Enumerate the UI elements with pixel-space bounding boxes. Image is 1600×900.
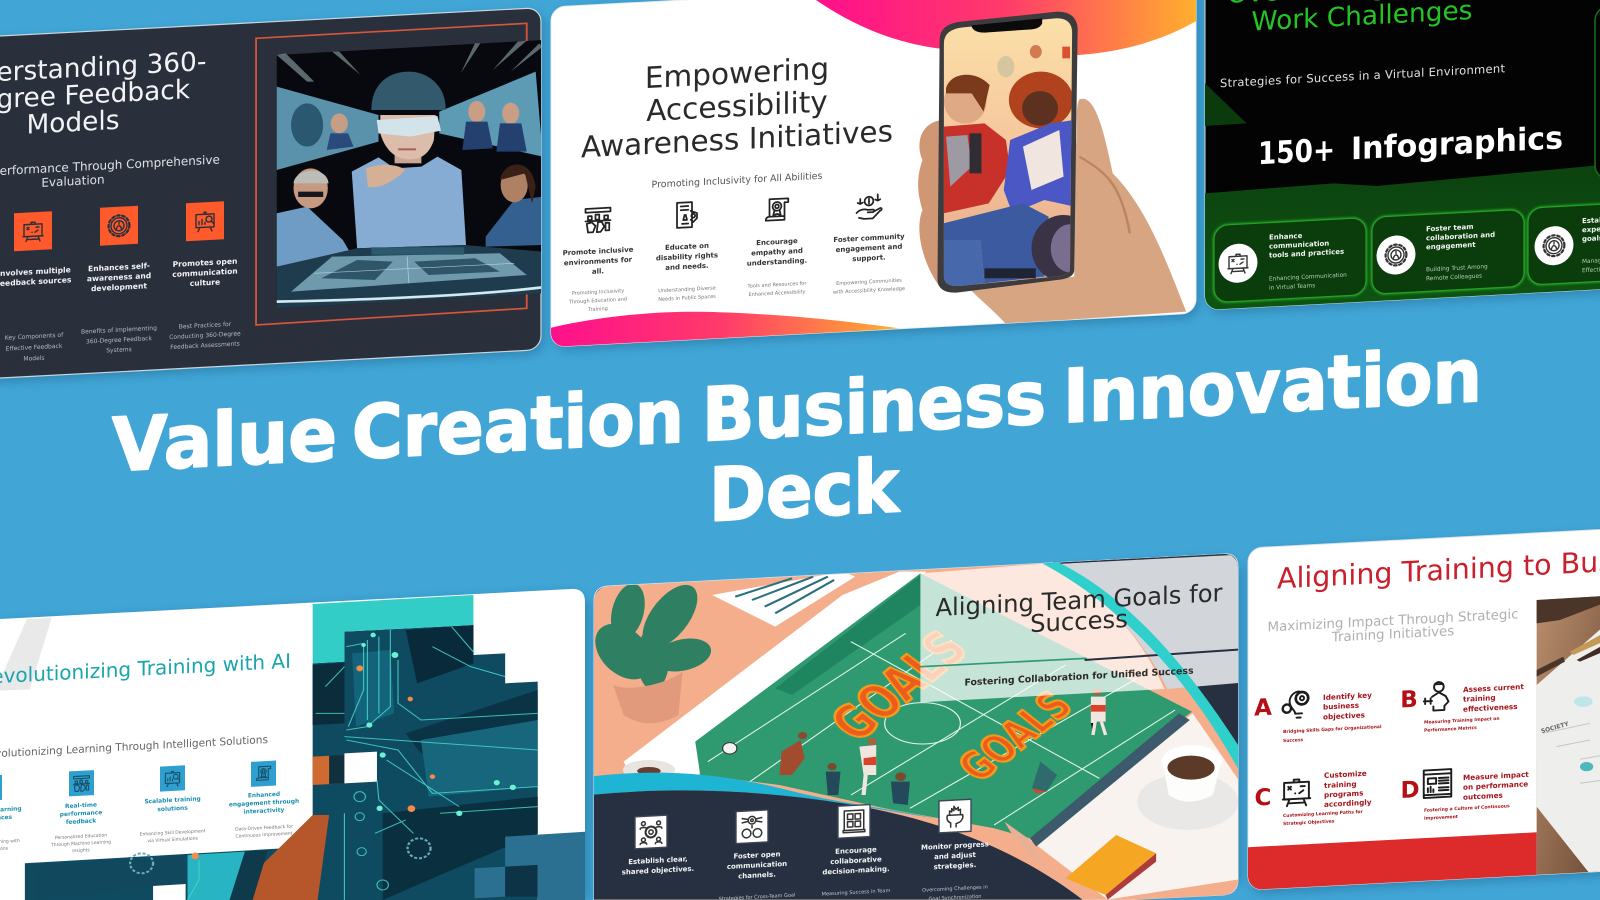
item D: on performance [1463,779,1528,792]
image: phone in hand with gradient waves [549,0,1198,353]
phone screen people [944,45,1072,286]
slide text [1254,536,1600,831]
item A: business [1323,701,1359,712]
bullet labels [622,839,989,888]
item D: Measure impact [1463,770,1529,782]
bullet labels: Promotes open [173,257,237,269]
bullet labels: performance [60,810,102,818]
bullet labels: all. [592,267,604,276]
bullet labels: interactivity [244,808,285,816]
panel: accessibility slide [549,0,1199,353]
bullet labels: collaborative [830,855,882,866]
item C: training [1324,779,1357,790]
bullet labels: channels. [738,870,776,880]
overlay headline: 150+ [1258,132,1335,172]
captions: Effective Feedback [6,343,63,353]
captions: via Virtual Simulations [147,836,199,844]
card: communication: Enhancing Communication [1269,273,1347,283]
card: expectations [1528,200,1600,285]
title: Awareness Initiatives [581,114,893,164]
heading: Value [112,392,337,489]
bullet labels: Encourage [835,846,877,856]
heading [112,333,1482,539]
item D: outcomes [1463,791,1503,802]
panel: team goals slide [584,545,1251,900]
item A [1254,687,1382,746]
captions: Models [23,355,45,363]
bullet labels: Monitor progress [921,840,989,852]
bullet labels: empathy and [751,247,803,258]
title [0,46,206,145]
item B [1400,678,1524,735]
bullet labels: disability rights [656,251,718,263]
item A: Bridging Skills Gaps for Organizational [1283,724,1382,735]
item A: Identify key [1323,691,1372,702]
card: collaboration: engagement [1426,241,1476,251]
card: communication: in Virtual Teams [1269,283,1315,292]
item B: Measuring Training Impact on [1424,716,1500,726]
image: woman at holographic table [256,23,543,325]
card: collaboration: Building Trust Among [1426,264,1488,273]
item B: effectiveness [1463,702,1518,714]
item C: accordingly [1324,798,1372,809]
bullet labels: communication [727,860,787,871]
title: Empowering [645,51,829,95]
heading: Business [702,355,1046,459]
bullet labels: shared objectives. [622,865,694,877]
title: Accessibility [646,85,828,128]
image: paper and pens with red band: SOCIETY [1540,720,1570,735]
captions: Data-Driven Feedback for [235,824,293,833]
icon: board [14,211,52,251]
bullet labels: feedback [66,818,97,826]
captions: Conducting 360-Degree [169,330,241,341]
card: collaboration: Foster team [1426,223,1474,233]
captions: Tools and Resources for [747,281,807,290]
bullet labels: Scalable training [144,796,201,805]
outside arc areas [1052,554,1238,745]
bullet labels: support. [852,253,886,263]
bullet labels: engagement through [229,799,299,809]
image: soccer field on desk [584,545,1251,900]
captions: Benefits of Implementing [81,325,157,336]
icons row [586,192,882,233]
captions: Personalized Education [55,832,107,841]
bullet labels: solutions [157,806,188,813]
item D [1400,765,1529,823]
title: Aligning Team Goals for [935,578,1223,622]
panel: remote work slide [1205,0,1600,323]
heading: Innovation [1063,333,1482,440]
title: Success [1030,604,1128,638]
captions: Feedback Assessments [170,340,240,351]
captions: Through Education and [568,297,627,306]
bullet labels: culture [190,277,220,288]
captions: Systems [106,346,132,354]
item A: A [1254,695,1272,722]
item B: Assess current [1463,682,1524,694]
slide text [0,648,299,860]
item C: Customizing Learning Paths for [1283,809,1364,819]
title [581,48,893,164]
captions: Understanding Diverse [658,285,716,294]
captions: Training [587,306,608,313]
players [779,688,1106,805]
overlay headline: Infographics [1351,120,1563,167]
background shapes [1205,83,1600,323]
item B: B [1400,687,1418,714]
captions [568,273,905,314]
bullet labels: engagement and [836,243,902,254]
bullet labels [563,231,905,278]
item D: D [1400,777,1420,804]
bullet labels [0,257,238,298]
item A: objectives [1323,710,1365,722]
captions: Key Components of [5,332,64,342]
item D: Improvement [1424,814,1459,822]
bottom wave [590,773,935,818]
captions: Continuous Improvement [235,831,293,840]
item B: Performance Metrics [1424,725,1477,734]
image: paper and pens with red band [1240,596,1600,897]
slide text [622,578,1223,900]
captions: 360-Degree Feedback [86,335,152,345]
subtitle: Training Initiatives [1331,624,1454,646]
heading: Creation [352,374,684,477]
bullet labels: strategies. [934,861,976,871]
captions: Empowering Communities [836,278,902,287]
captions: Through Machine Learning [50,839,111,848]
image: circuit mosaic [0,595,587,900]
title: Models [27,105,119,141]
icon: gear [100,206,138,246]
bullet labels: Foster community [833,232,905,244]
slide text [0,44,241,368]
bullet labels: development [91,281,147,293]
translucent header [920,563,1165,702]
subtitle: Promoting Inclusivity for All Abilities [652,171,822,191]
subtitle: Maximizing Impact Through Strategic [1268,607,1518,635]
card: communication [1214,218,1366,303]
bullet labels: understanding. [747,257,807,268]
icons row [635,799,971,849]
captions: Best Practices for [179,321,232,331]
captions [5,320,241,364]
bullet labels: communication [172,267,238,279]
captions [719,882,988,900]
card: communication: tools and practices [1269,248,1344,260]
bullet labels: and needs. [665,262,709,272]
panel: 360-degree feedback slide [0,8,544,385]
title [935,578,1223,643]
bullet labels: Real-time [65,802,97,810]
card: communication: Enhance [1269,232,1303,242]
bullet labels: environments for [564,256,633,267]
icon: chart [186,201,224,241]
captions: Needs in Public Spaces [658,294,716,303]
item C: Customize [1324,769,1367,780]
item C: Strategic Objectives [1283,818,1335,827]
subtitle [1268,607,1518,649]
captions: Insights [72,847,90,854]
item C: C [1255,785,1271,812]
panel: AI training slide [0,589,588,900]
bullet labels: decision-making. [822,865,890,877]
card: collaboration: Remote Colleagues [1426,273,1482,282]
bullet labels: Foster open [734,850,780,861]
subtitle: Fostering Collaboration for Unified Success [964,666,1194,689]
bullet labels: Educate on [665,242,709,252]
GOALS lettering: GOALS [818,621,980,751]
item A: Success [1283,737,1303,744]
overlay headline [1258,120,1563,172]
slide content [1214,0,1600,303]
captions: Promoting Inclusivity [572,288,624,297]
card: communication: communication [1269,239,1329,251]
captions [0,823,293,860]
bullet labels: Encourage [756,237,798,247]
GOALS lettering: GOALS [948,683,1083,790]
captions: Enhancing Skill Development [140,828,206,838]
captions: Enhanced Accessibility [748,289,806,298]
captions: Measuring Success in Team [822,888,890,898]
icons row [0,761,276,801]
item C: programs [1324,788,1364,800]
bullet labels: Establish clear, [628,855,688,866]
card: collaboration: collaboration and [1426,231,1495,242]
bullet labels: Enhances self- [88,261,150,273]
item D: Fostering a Culture of Continuous [1424,803,1510,814]
captions: with Accessibility Knowledge [833,286,905,296]
bullet labels: and adjust [934,851,977,861]
item B: training [1463,693,1496,704]
GOALS lettering [818,621,1083,790]
heading: Deck [709,443,901,539]
slide text [563,47,905,314]
side box [1595,0,1600,180]
subtitle [0,152,220,196]
panel: training alignment slide [1240,522,1600,897]
bullet labels: Enhanced [248,792,280,800]
item C [1255,769,1372,829]
captions: Overcoming Challenges in [922,884,988,894]
card: collaboration [1372,209,1524,294]
bullet labels: Promote inclusive [563,246,634,257]
bullet labels: awareness and [87,271,151,283]
bullet labels [0,791,299,831]
subtitle: Evaluation [41,173,105,190]
subtitle: Strategies for Success in a Virtual Environment [1220,61,1505,90]
